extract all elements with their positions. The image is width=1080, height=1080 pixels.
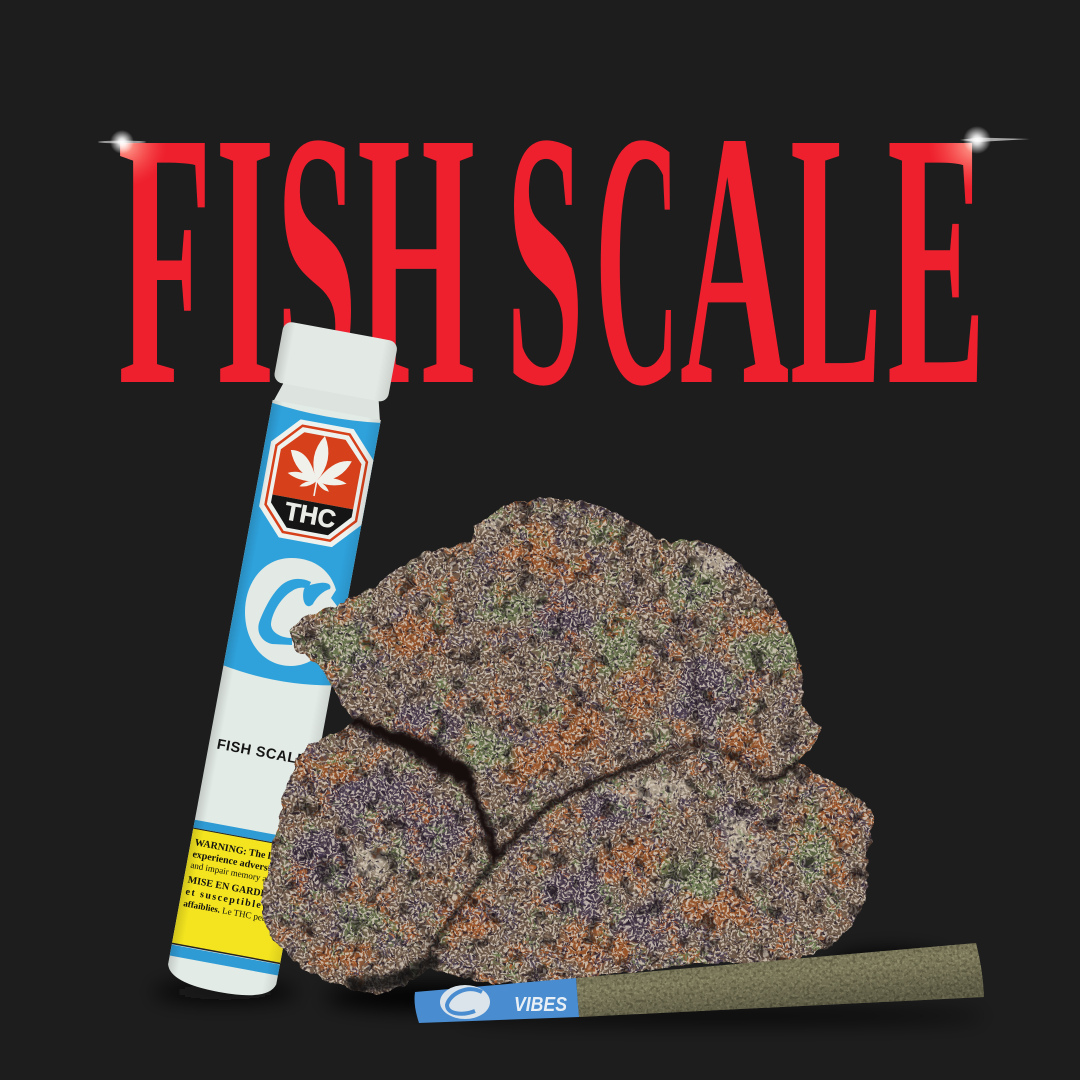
VIBES label: VIBES	[514, 994, 568, 1016]
Cookies logo on tube	[245, 558, 337, 666]
warning text: affaiblies. Le THC peut causer de	[183, 898, 305, 930]
cookies logo on tip	[440, 985, 490, 1019]
health warning panel	[170, 820, 340, 982]
title: FISH SCALE: F	[118, 57, 212, 461]
bud base colour	[250, 490, 880, 1000]
title: FISH SCALE: E	[887, 58, 986, 462]
THC label: THC	[282, 497, 338, 534]
floor shadow	[153, 951, 985, 1022]
colour patches	[288, 511, 853, 969]
warning text: WARNING: The higher the THC	[194, 837, 335, 874]
joint texture	[576, 943, 984, 1017]
warning text: and impair memory and concentration	[190, 860, 327, 895]
pre-roll joint	[414, 940, 990, 1023]
title: FISH SCALE: A	[680, 58, 789, 462]
tube cap	[269, 321, 398, 424]
joint body	[576, 943, 984, 1017]
title: FISH SCALE: L	[790, 57, 882, 461]
title: FISH SCALE	[118, 56, 986, 462]
crevices between buds	[330, 620, 798, 985]
strain name on tube: FISH SCALE	[215, 737, 308, 769]
tube body	[165, 400, 381, 1002]
blue filter tip	[414, 978, 579, 1023]
cannabis bud cluster	[250, 490, 880, 1000]
title: FISH SCALE: S	[276, 58, 357, 462]
title: FISH SCALE: C	[595, 56, 680, 461]
warning text: MISE EN GARDE : Plus le	[187, 875, 304, 907]
poster scene	[98, 126, 1030, 1026]
warning text: experience adverse effects	[192, 849, 302, 880]
sparkle: left	[98, 130, 162, 180]
tube cylinder shading	[165, 400, 381, 1002]
cannabis leaf icon	[283, 430, 355, 502]
title: FISH SCALE: I	[215, 56, 275, 461]
THC warning symbol	[254, 415, 378, 552]
pre-roll tube	[162, 321, 433, 1009]
warning text: et susceptible d'éprouver	[185, 886, 328, 923]
bud mottled noise layers	[250, 490, 880, 1000]
title: FISH SCALE: H	[357, 58, 475, 462]
title: FISH SCALE: S	[506, 57, 584, 461]
blue label	[223, 403, 380, 690]
warning text	[183, 837, 337, 934]
sparkle: right	[934, 126, 1030, 185]
